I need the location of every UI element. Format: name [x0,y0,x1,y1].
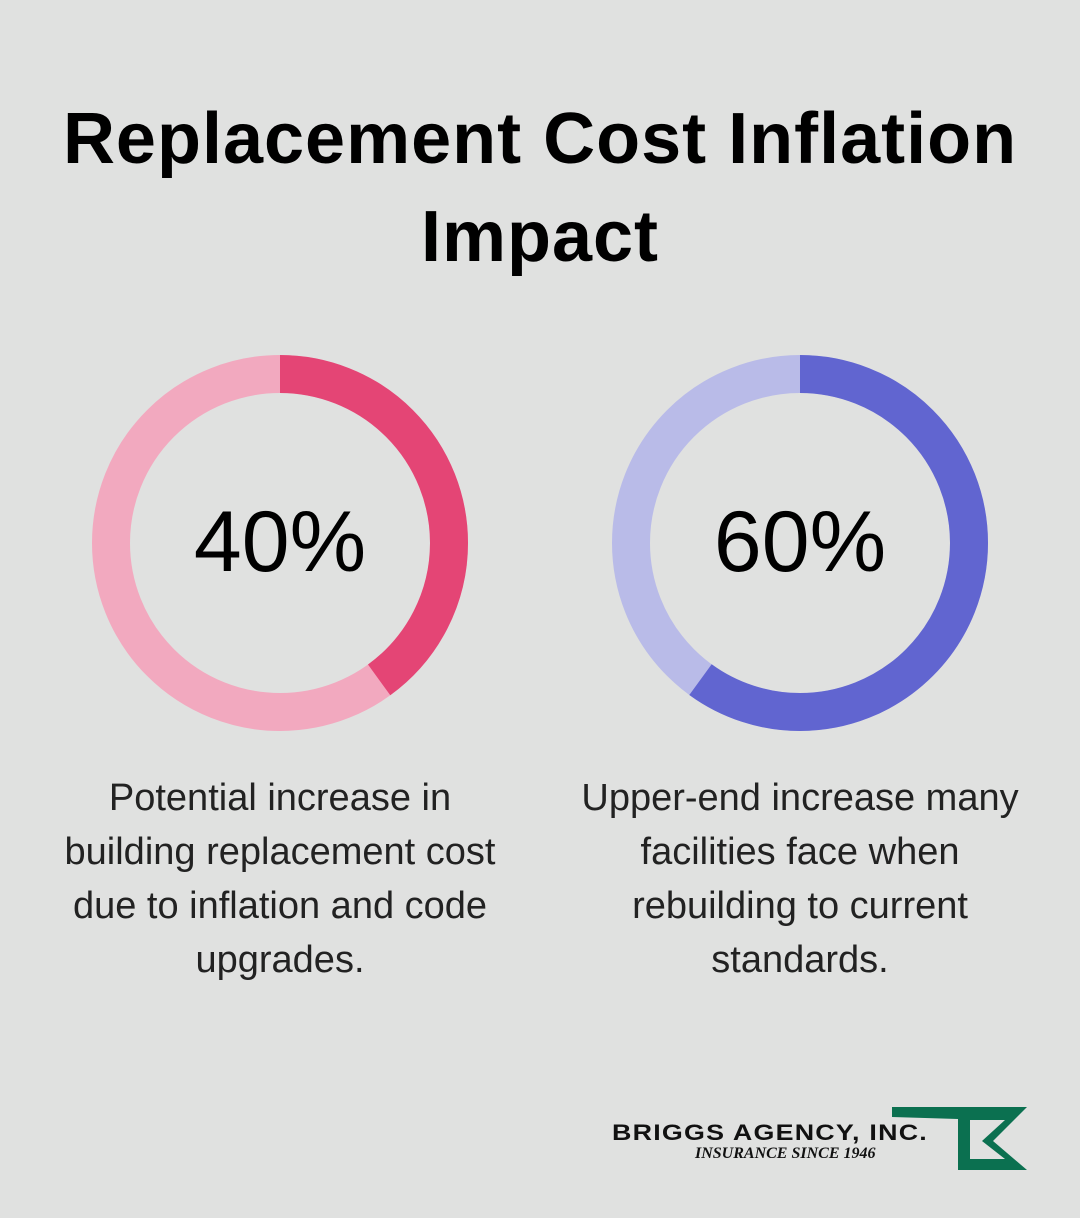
chart: 40% donut: 40% [194,494,366,590]
caption right: Upper-end increase many [581,777,1019,819]
caption left: upgrades. [195,939,364,981]
caption left: due to inflation and code [73,885,487,927]
logo: INSURANCE SINCE 1946 [695,1145,876,1162]
logo [612,1107,1027,1170]
caption left: Potential increase in [109,777,451,819]
caption right [581,777,1019,981]
title: Replacement Cost Inflation [63,99,1017,179]
title [63,99,1017,277]
chart: 40% donut [92,355,468,731]
chart: 60% donut: 60% [714,494,886,590]
caption left: building replacement cost [65,831,495,873]
caption right: rebuilding to current [632,885,968,927]
title: Impact [421,197,659,277]
logo: BRIGGS AGENCY, INC. [612,1120,928,1145]
caption right: standards. [711,939,889,981]
chart: 60% donut [612,355,988,731]
caption left [65,777,496,981]
caption right: facilities face when [641,831,959,873]
